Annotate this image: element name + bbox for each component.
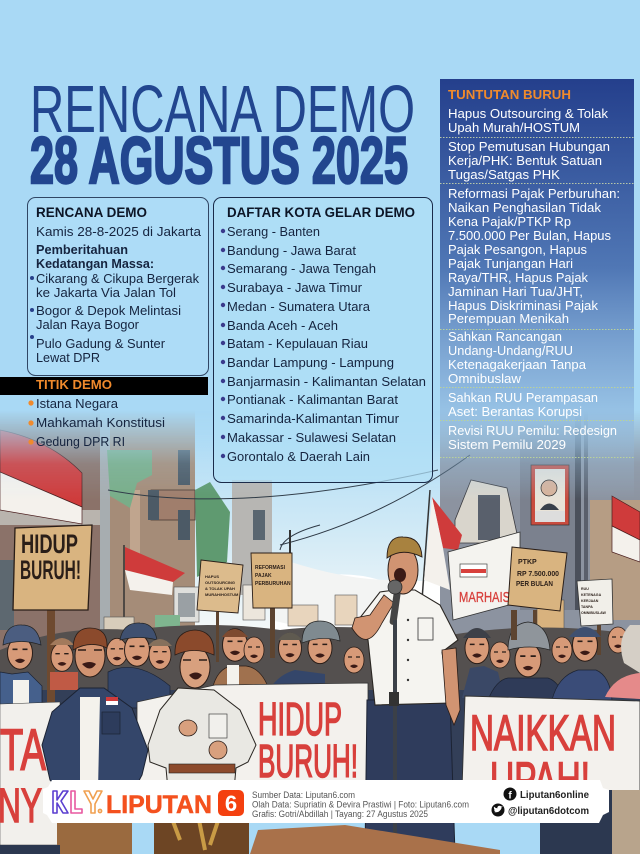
poster portrait <box>531 465 569 525</box>
demand 2: Stop Pemutusan Hubungan <box>448 139 610 154</box>
demand 4: Omnibuslaw <box>448 371 522 386</box>
sign: reformasi pajak: PERBURUHAN <box>255 581 291 587</box>
subheading: Pemberitahuan <box>36 242 128 257</box>
speaker <box>352 537 460 854</box>
sign: ptkp: RP 7.500.000 <box>517 571 559 578</box>
demand 5: Sahkan RUU Perampasan <box>448 390 598 405</box>
subheading: Kedatangan Massa: <box>36 256 154 271</box>
list: cities: Serang - Banten <box>227 224 320 239</box>
demand 3: Jaminan Hari Tua/JHT, <box>448 284 583 299</box>
demand 5: Aset: Berantas Korupsi <box>448 404 582 419</box>
left sign: hidup buruh: BURUH! <box>20 555 81 585</box>
banner: ta ny: TA <box>0 718 46 783</box>
demand 4: Sahkan Rancangan <box>448 329 562 344</box>
list: cities: Pontianak - Kalimantan Barat <box>227 392 398 407</box>
small back signs <box>104 585 564 635</box>
subheading <box>36 242 154 271</box>
white sign: OMNIBUSLAW <box>581 611 607 615</box>
list: locations: Istana Negara <box>36 396 119 411</box>
heading: tuntutan buruh: TUNTUTAN BURUH <box>448 87 571 102</box>
banner: ta ny <box>0 702 60 845</box>
sign: hapus outsourcing: HAPUS <box>205 574 219 579</box>
list: cities: Gorontalo & Daerah Lain <box>227 449 370 464</box>
sign: hapus outsourcing: & TOLAK UPAH <box>205 586 235 591</box>
list: cities: Banda Aceh - Aceh <box>227 318 338 333</box>
demand 3: Pajak Pesangon, Hapus <box>448 242 587 257</box>
sign: hapus outsourcing: OUTSOURCING <box>205 580 235 585</box>
demand 4 <box>448 329 587 386</box>
sign: reformasi pajak: REFORMASI <box>255 565 286 571</box>
flag behind speaker <box>422 490 462 600</box>
left sign: hidup buruh: HIDUP <box>21 529 78 559</box>
street lamp <box>289 530 291 552</box>
logo: kly <box>53 791 102 813</box>
banner: ta ny: NY <box>0 780 42 833</box>
list: locations: Gedung DPR RI <box>36 434 125 449</box>
list: arrival routes <box>30 271 199 365</box>
social: twitter <box>492 804 589 817</box>
sign: reformasi pajak <box>251 553 292 608</box>
banner: naikkan upah <box>462 696 640 790</box>
credits: Sumber Data: Liputan6.com <box>252 790 355 800</box>
list: arrival routes: Lewat DPR <box>36 350 100 365</box>
demand 3: Pajak Tunjangan Hari <box>448 256 573 271</box>
sign: ptkp: PTKP <box>518 559 537 566</box>
demand 3 <box>448 186 620 326</box>
banner: naikkan upah: UPAH! <box>490 752 590 808</box>
social: facebook: f <box>508 790 512 802</box>
footer <box>43 780 609 823</box>
demand 2 <box>448 139 610 182</box>
illustration: protest crowd <box>0 400 640 854</box>
demand 3: Naikan Penghasilan Tidak <box>448 200 601 215</box>
list: locations <box>28 396 165 449</box>
sign: ptkp <box>508 547 567 640</box>
white cloth banner <box>275 562 390 628</box>
demand 4: Undang-Undang/RUU <box>448 343 573 358</box>
demand 3: Perempuan Menikah <box>448 311 569 326</box>
black header bar <box>0 377 208 395</box>
lower figures <box>0 790 640 854</box>
sign: reformasi pajak: PAJAK <box>255 573 272 579</box>
list: cities: Surabaya - Jawa Timur <box>227 280 363 295</box>
white sign: TANPA <box>581 605 593 609</box>
demand 6 <box>448 423 617 452</box>
big flag right <box>612 496 640 562</box>
demand 6: Sistem Pemilu 2029 <box>448 437 566 452</box>
white sign: KERJAAN <box>581 599 599 603</box>
social: twitter: @liputan6dotcom <box>508 806 589 817</box>
heading: rencana demo: RENCANA DEMO <box>36 205 147 220</box>
demand 3: Hapus Diskriminasi Pajak <box>448 298 598 313</box>
right buildings <box>440 400 640 640</box>
demand 3: Reformasi Pajak Perburuhan: <box>448 186 620 201</box>
list: arrival routes: Cikarang & Cikupa Bergerak <box>36 271 199 286</box>
date text: Kamis 28-8-2025 di Jakarta <box>36 224 202 239</box>
banner: hidup buruh: BURUH! <box>258 735 358 787</box>
sky and clouds <box>195 448 440 630</box>
panel: daftar kota <box>214 198 432 482</box>
list: cities <box>221 224 426 464</box>
credits: Olah Data: Supriatin & Devira Prastiwi | Foto: Liputan6.com <box>252 800 469 810</box>
overhead wires <box>108 455 470 550</box>
flag on pole centre-left <box>124 545 185 620</box>
social: facebook <box>504 788 589 802</box>
list: cities: Samarinda-Kalimantan Timur <box>227 411 400 426</box>
demand 2: Kerja/PHK: Bentuk Satuan <box>448 153 602 168</box>
black header bar: TITIK DEMO <box>36 377 112 392</box>
list: cities: Bandung - Jawa Barat <box>227 243 356 258</box>
panel: titik demo <box>0 377 208 449</box>
list: arrival routes: Jalan Raya Bogor <box>36 317 140 332</box>
demand 3: Raya/THR, Hapus Pajak <box>448 270 588 285</box>
logo: 6: 6 <box>225 791 237 816</box>
demand 6: Revisi RUU Pemilu: Redesign <box>448 423 617 438</box>
back banner <box>448 532 520 620</box>
sign: hapus outsourcing: MURAH/HOSTUM <box>205 592 239 597</box>
demand 3: Kena Pajak/PTKP Rp <box>448 214 571 229</box>
logo: liputan: LIPUTAN <box>106 791 212 819</box>
left marcher in navy shirt <box>42 628 148 790</box>
list: arrival routes: Pulo Gadung & Sunter <box>36 336 166 351</box>
list: locations: Mahkamah Konstitusi <box>36 415 165 430</box>
credits: Grafis: Gotri/Abdillah | Tayang: 27 Agustus 2025 <box>252 809 428 819</box>
panel: tuntutan buruh <box>440 79 634 499</box>
demand 5 <box>448 390 598 419</box>
list: cities: Makassar - Sulawesi Selatan <box>227 430 396 445</box>
heading: daftar kota: DAFTAR KOTA GELAR DEMO <box>227 205 415 220</box>
list: arrival routes: Bogor & Depok Melintasi <box>36 303 181 318</box>
demand 3: 7.500.000 Per Bulan, Hapus <box>448 228 611 243</box>
big flag left <box>0 430 82 524</box>
demand 1 <box>448 106 609 135</box>
back banner: MARHAIST <box>459 589 517 606</box>
logo: 6 <box>218 790 244 816</box>
panel: rencana demo <box>28 198 208 376</box>
list: cities: Bandar Lampung - Lampung <box>227 355 394 370</box>
demand 2: Tugas/Satgas PHK <box>448 167 560 182</box>
demand 4: Ketenagakerjaan Tanpa <box>448 357 587 372</box>
social: facebook: Liputan6online <box>520 790 589 801</box>
white sign <box>577 579 613 626</box>
list: cities: Medan - Sumatera Utara <box>227 299 371 314</box>
left sign: hidup buruh <box>13 525 92 610</box>
white sign: RUU <box>581 587 589 591</box>
white sign: KETENAGA <box>581 593 602 597</box>
sign: hapus outsourcing <box>197 560 243 613</box>
centre marcher in white shirt <box>148 630 256 790</box>
banner: hidup buruh: HIDUP <box>258 693 342 745</box>
sign: ptkp: PER BULAN <box>516 581 553 588</box>
title line 1: RENCANA DEMO <box>30 72 415 147</box>
title line 2: 28 AGUSTUS 2025 <box>30 123 408 197</box>
banner: hidup buruh <box>137 683 368 790</box>
credits <box>252 790 469 819</box>
list: cities: Semarang - Jawa Tengah <box>227 261 376 276</box>
list: cities: Batam - Kepulauan Riau <box>227 336 368 351</box>
list: arrival routes: ke Jakarta Via Jalan Tol <box>36 285 176 300</box>
title <box>30 72 415 197</box>
crowd band <box>0 608 640 780</box>
list: cities: Banjarmasin - Kalimantan Selatan <box>227 374 426 389</box>
left buildings <box>0 414 272 650</box>
demand 1: Hapus Outsourcing & Tolak <box>448 106 609 121</box>
demand 1: Upah Murah/HOSTUM <box>448 120 580 135</box>
